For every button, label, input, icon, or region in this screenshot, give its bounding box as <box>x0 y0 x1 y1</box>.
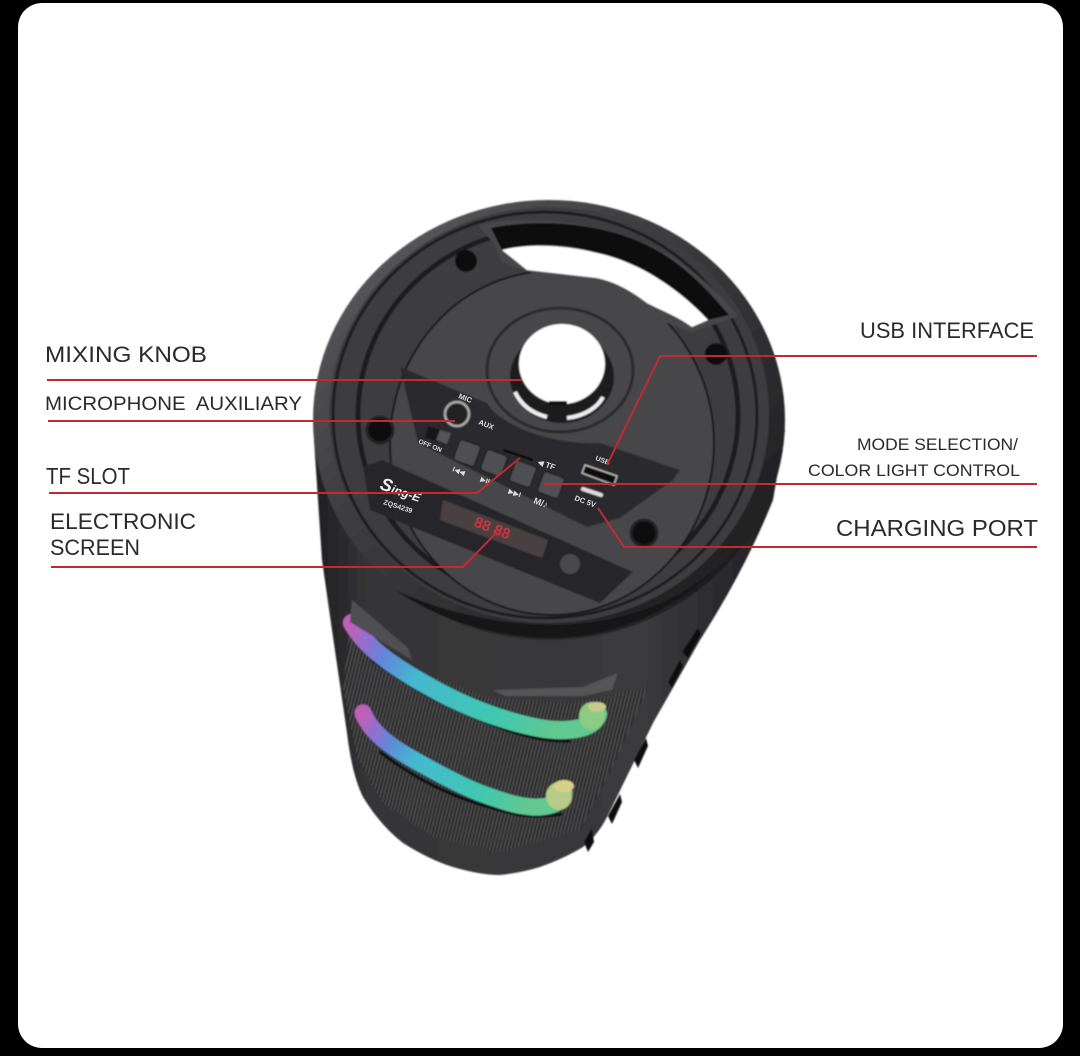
led screen <box>440 500 548 558</box>
collar notch <box>493 673 618 696</box>
dark shadow band <box>395 570 715 638</box>
silk: next: ▶▶I <box>507 488 522 499</box>
left bevel piece <box>350 600 412 660</box>
line: usb interface <box>607 356 1037 465</box>
ir sensor <box>560 554 580 574</box>
silk: play: ▶II <box>479 476 490 486</box>
labels <box>45 318 1038 560</box>
mic knob <box>445 402 469 426</box>
right side vents <box>584 628 701 852</box>
line: charging port <box>598 508 1037 547</box>
usb port <box>582 465 617 485</box>
speaker body <box>314 430 785 875</box>
knob ring <box>487 308 633 432</box>
screw hole left <box>367 417 393 443</box>
upper light bar <box>352 623 598 730</box>
callout lines <box>47 356 1037 567</box>
silk: model: ZQS4239 <box>382 499 413 515</box>
handle band <box>478 220 738 332</box>
label: microphone auxiliary: MICROPHONE AUXILIARY <box>45 393 302 415</box>
knob notch <box>549 401 567 405</box>
button play <box>480 449 508 477</box>
tf slot <box>503 450 533 460</box>
off on switch <box>425 426 451 444</box>
upper bar tip <box>579 702 605 730</box>
label: mixing knob: MIXING KNOB <box>45 342 207 367</box>
lower light bar <box>363 713 564 807</box>
label: tf slot: TF SLOT <box>46 463 130 489</box>
silk: dc 5v: DC 5V <box>573 493 597 509</box>
silk: aux: AUX <box>477 418 495 432</box>
speaker illustration <box>313 200 785 875</box>
display panel <box>363 460 633 603</box>
upper light bar shadow <box>372 660 570 741</box>
screw hole top right <box>705 343 727 365</box>
silk: mic: MIC <box>457 392 474 405</box>
panel silk labels <box>378 392 611 543</box>
button next <box>509 460 537 488</box>
control panel <box>400 367 680 527</box>
dc port <box>583 489 601 495</box>
knob recess <box>510 331 614 423</box>
silk: m: M/♪ <box>532 495 549 510</box>
screw hole top left <box>455 250 477 272</box>
button mode <box>537 471 565 499</box>
silk: usb: USB <box>594 455 611 467</box>
screw hole right <box>631 520 657 546</box>
handle opening dark <box>491 223 729 320</box>
outer groove <box>333 212 757 618</box>
top disc outer rim <box>313 200 785 640</box>
label: usb interface: USB INTERFACE <box>860 318 1034 343</box>
inner plate <box>390 271 714 615</box>
lower bar tip <box>546 782 572 810</box>
disc face <box>329 207 769 623</box>
lower light bar shadow <box>380 752 562 816</box>
inner groove <box>358 229 738 601</box>
label: mode selection: MODE SELECTION/ <box>857 436 1018 454</box>
line: mixing knob <box>47 379 522 381</box>
line: tf slot <box>49 458 520 493</box>
switch slider <box>436 430 451 444</box>
label: color light control: COLOR LIGHT CONTROL <box>808 462 1020 480</box>
handle opening white <box>502 246 708 327</box>
line: microphone auxiliary <box>48 420 455 422</box>
silk: tf: ◀ TF <box>536 457 557 472</box>
line: mode selection <box>544 483 1037 485</box>
knob highlight arcs <box>515 392 603 418</box>
label: screen: SCREEN <box>50 535 140 560</box>
silk: previous: I◀◀ <box>451 466 466 477</box>
upper bar tip highlight <box>588 702 606 712</box>
silk: brand: Sing-E <box>378 474 425 506</box>
button previous <box>453 439 481 467</box>
line: electronic screen <box>51 532 497 567</box>
lower bar tip highlight <box>554 780 574 792</box>
front grille <box>343 630 648 853</box>
label: electronic: ELECTRONIC <box>50 509 196 534</box>
silk: off on: OFF ON <box>417 438 443 454</box>
led digits: 88 88 <box>472 514 513 543</box>
label: charging port: CHARGING PORT <box>836 515 1038 541</box>
knob white opening <box>519 324 605 404</box>
